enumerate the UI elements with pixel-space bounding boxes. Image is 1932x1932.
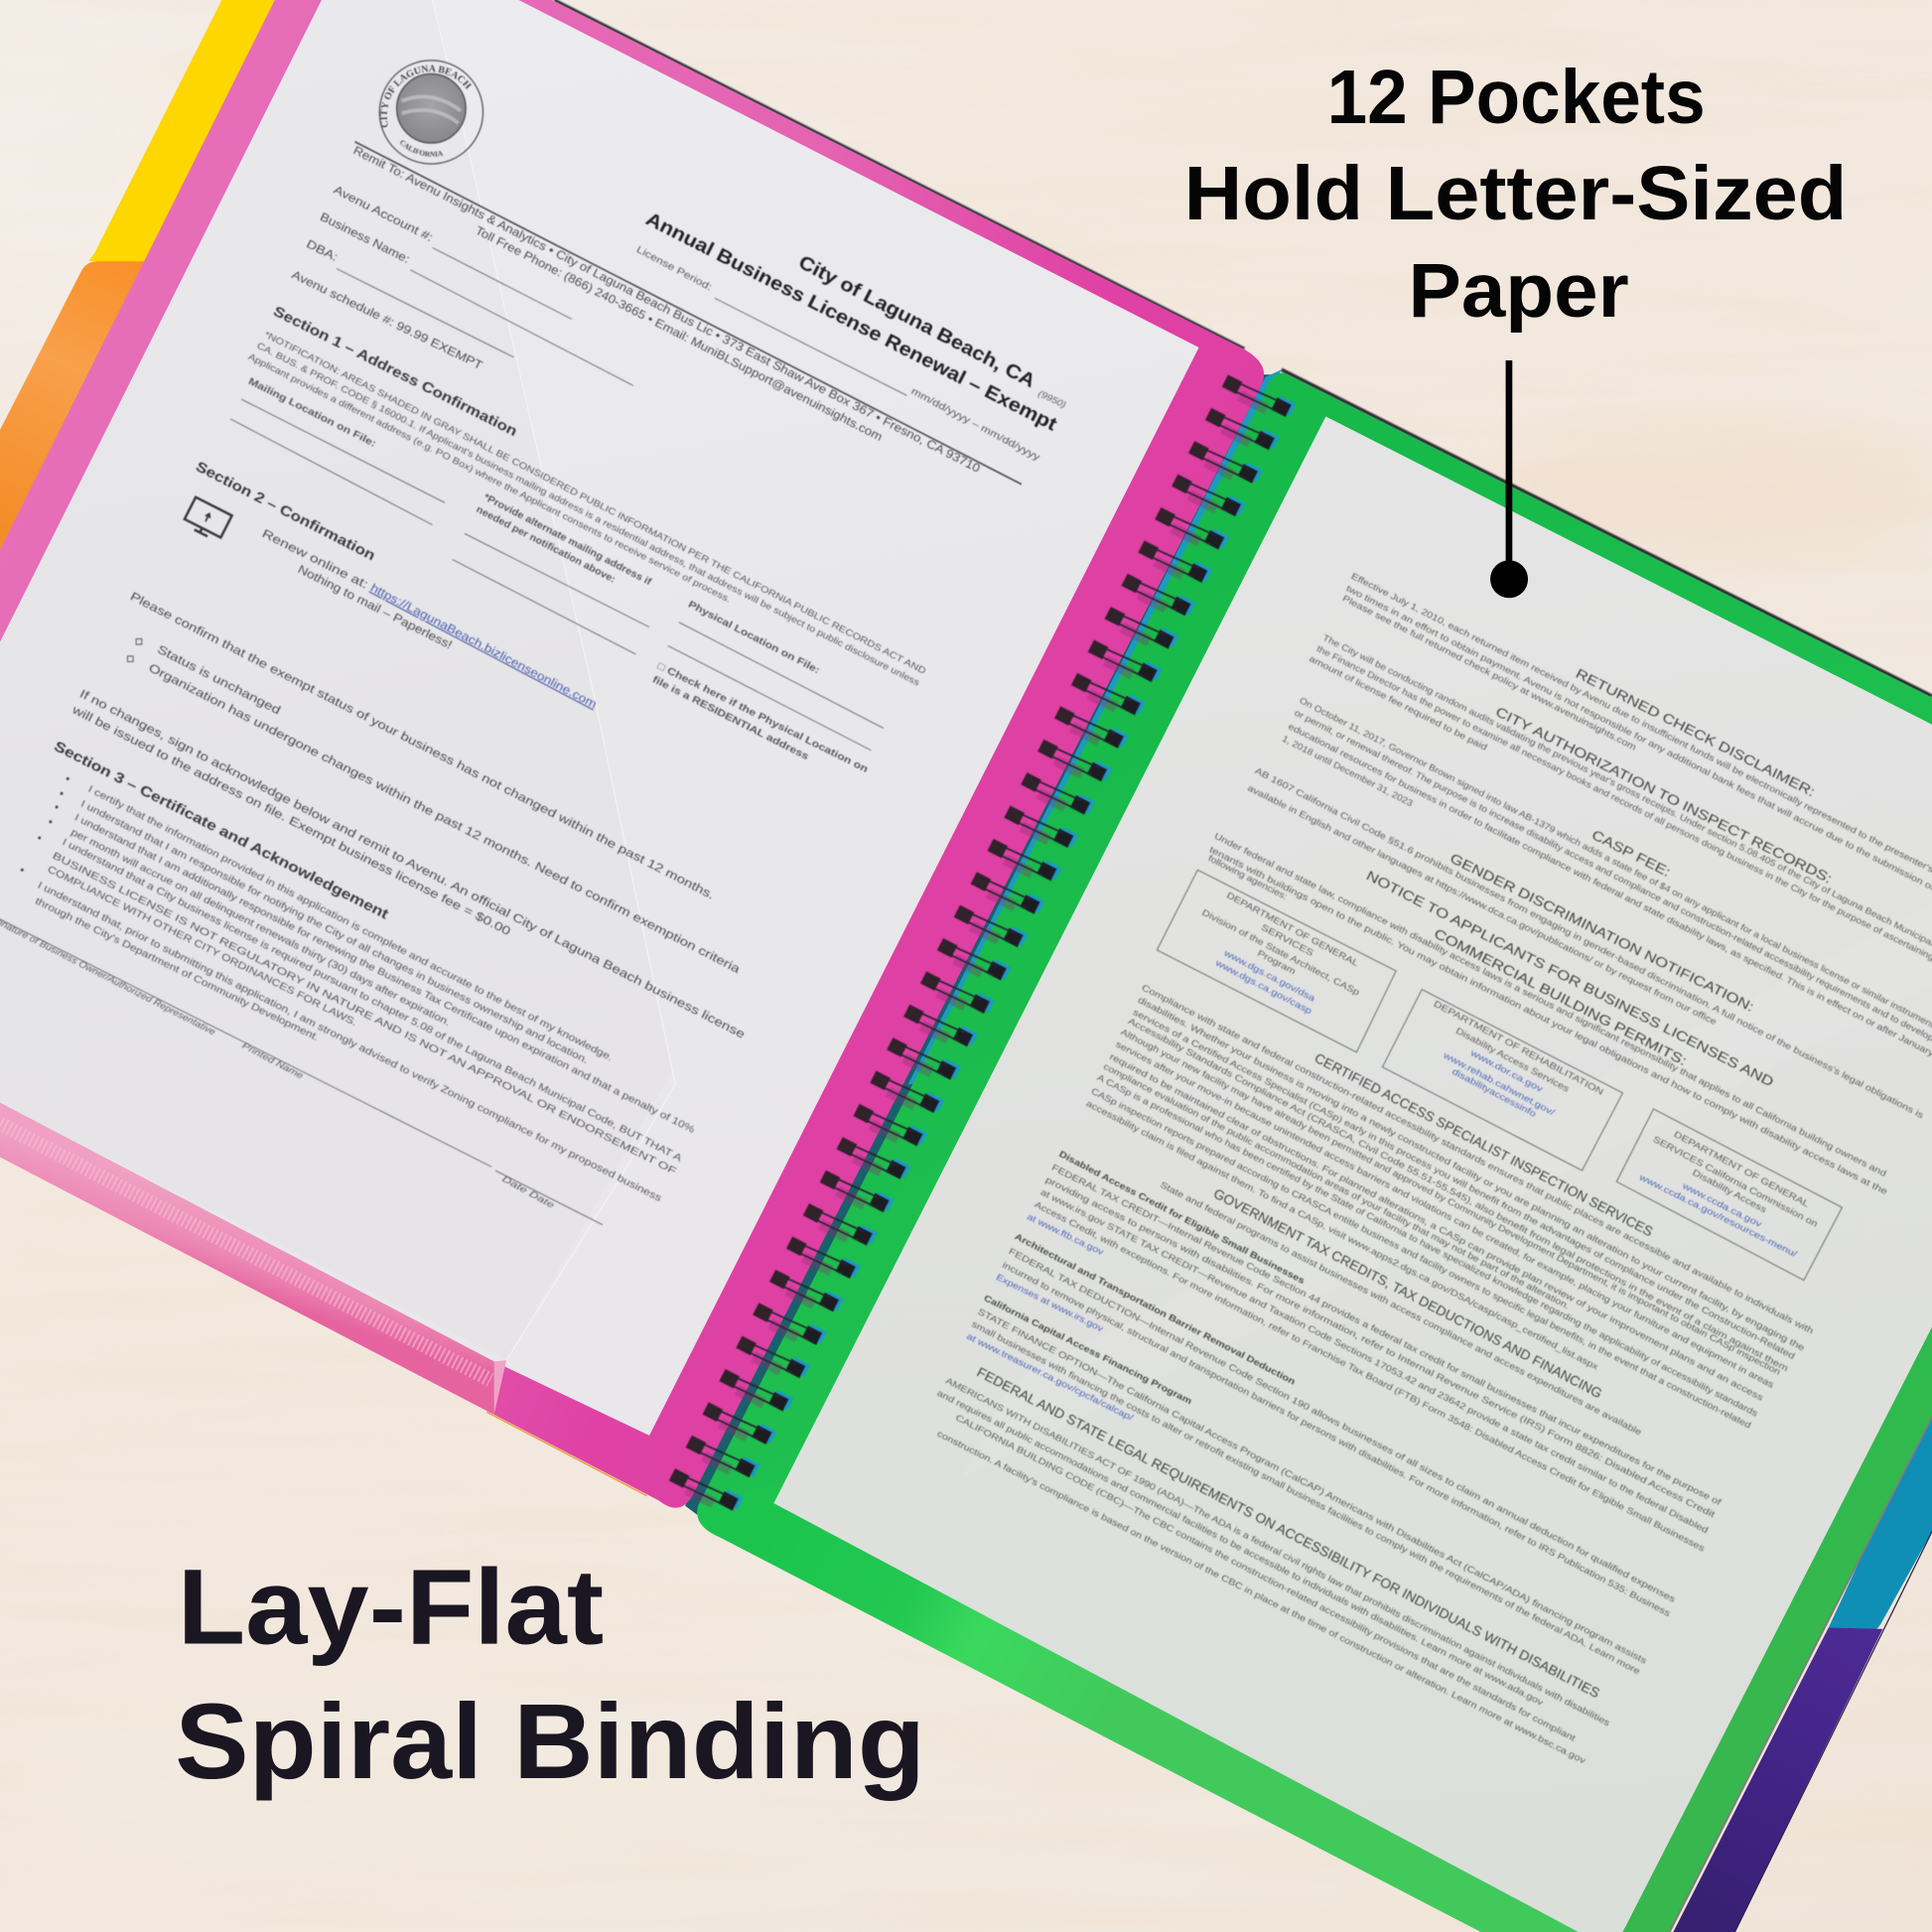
section 3: COMPLIANCE WITH OTHER CITY ORDINANCES FOR LAWS. <box>46 864 358 1029</box>
heading: 12 pockets hold letter-sized paper: 12 Pockets <box>1327 55 1706 140</box>
remit details: Avenu Account #: <box>332 183 436 244</box>
section 1: CA. BUS. & PROF. CODE § 16000.1. If Applicant's business mailing address is a residential address, that address will be subject to public disclosure unless <box>255 341 921 688</box>
pocket strip with ridges <box>0 1103 506 1415</box>
government tax credits: California Capital Access Financing Program <box>982 1293 1193 1406</box>
form header: License Period: <box>634 244 714 293</box>
clear pocket film with crease <box>0 0 675 1360</box>
section 1: *NOTIFICATION: AREAS SHADED IN GRAY SHALL BE CONSIDERED PUBLIC INFORMATION PER THE CALIFORNIA PUBLIC RECORDS ACT AND <box>263 330 928 676</box>
casp fee: 1, 2018 until December 31, 2023 <box>1281 734 1415 808</box>
certified access specialist services <box>1084 982 1815 1431</box>
certified access specialist services: Although your new facility may have already been permitted and approved by Community Development Department, it is important to obtain CASp inspection <box>1119 1027 1782 1377</box>
form header: City of Laguna Beach, CA <box>795 252 1038 392</box>
form header: (9950) <box>1036 388 1067 410</box>
federal and state legal requirements: construction. A facility's compliance is based on the version of the CBC in place at the time of construction or alteration. Learn more at www.bsc.ca.gov <box>935 1429 1587 1766</box>
section 1: Mailing Location on File: <box>246 376 377 450</box>
casp fee: educational resources for business in order to facilitate compliance with federal and state disability laws, as specified. This is in effect on or after January <box>1287 721 1932 1058</box>
right document: disclosures <box>935 571 1932 1766</box>
folder tabs: right side <box>1673 1405 1932 1932</box>
remit details: Avenu schedule #: 99.99 EXEMPT <box>290 267 484 372</box>
section 2: Renew online at: <box>260 526 370 592</box>
agency box 1: SERVICES <box>1260 922 1315 958</box>
city seal <box>377 59 484 165</box>
agency box 1: DEPARTMENT OF GENERAL <box>1225 890 1360 968</box>
right green cover <box>697 369 1932 1932</box>
section 2: Status is unchanged <box>155 642 283 717</box>
section 1: Section 1 – Address Confirmation <box>270 304 519 440</box>
agency box 1: www.dgs.ca.gov/dsa <box>1221 947 1316 1004</box>
tab: orange <box>0 261 150 550</box>
tab: yellow <box>88 0 275 286</box>
federal and state legal requirements: AMERICANS WITH DISABILITIES ACT OF 1990 (ADA)—The ADA is a federal civil rights law that prohibits discrimination against individuals with disabilities <box>944 1375 1612 1728</box>
casp fee: or permit, or renewal thereof. The purpose is to increase disability access and compliance and construction-related accessibility requirements and to develop <box>1293 708 1932 1043</box>
remit details: Remit To: Avenu Insights & Analytics • City of Laguna Beach Bus Lic • 373 East Shaw Ave Box 367 • Fresno, CA 93710 <box>351 143 983 476</box>
section 2: If no changes, sign to acknowledge below and remit to Avenu. An official City of Laguna Beach business license <box>77 686 748 1041</box>
federal and state legal requirements: CALIFORNIA BUILDING CODE (CBC)—The CBC contains the construction-related accessibility provisions that are the standards for compliant <box>954 1413 1578 1743</box>
notice to applicants <box>1206 831 1889 1196</box>
remit details: Toll Free Phone: (866) 240-3665 • Email: MuniBLSupport@avenuinsights.com <box>473 223 885 444</box>
returned check disclaimer <box>1341 571 1932 893</box>
section 1: Physical Location on File: <box>686 600 821 676</box>
casp fee <box>1281 695 1932 1058</box>
returned check disclaimer: Please see the full returned check policy at www.avenuinsights.com <box>1341 593 1638 753</box>
federal and state legal requirements: and requires all public accommodations and commercial facilities to be accessible to individuals with disabilities. Learn more at www.ada.gov <box>935 1388 1546 1708</box>
casp fee: CASP FEE: <box>1589 827 1673 880</box>
heading: 12 pockets hold letter-sized paper <box>1184 55 1847 334</box>
section 2: will be issued to the address on file. Exempt business license fee = $0.00 <box>69 702 513 938</box>
city seal: CITY OF LAGUNA BEACH <box>379 65 473 128</box>
agency box 1: Division of the State Architect, CASp <box>1200 907 1361 998</box>
section 3: I understand that a City business license is required pursuant to chapter 5.08 of the Laguna Beach Municipal Code, BUT THAT A <box>61 837 684 1165</box>
section 2: Please confirm that the exempt status of your business has not changed within the past 12 months. <box>128 589 717 902</box>
certified access specialist services: CASp inspection reports prepared according to CRASCA entitle business and facility owners to specific legal benefits, in the event that a construction-related <box>1089 1086 1752 1431</box>
heading: 12 pockets hold letter-sized paper: Paper <box>1409 248 1629 334</box>
lower green band <box>697 1484 1614 1932</box>
section 2: https://LagunaBeach.bizlicenseonline.com <box>368 581 600 711</box>
section 3: Date Date <box>500 1173 556 1210</box>
government tax credits: Disabled Access Credit for Eligible Small Businesses <box>1057 1149 1307 1286</box>
form header: mm/dd/yyyy – mm/dd/yyyy <box>909 386 1041 464</box>
agency box 2: www.dor.ca.gov <box>1468 1047 1545 1094</box>
section 1: file is a RESIDENTIAL address <box>650 674 811 762</box>
heading: lay-flat spiral binding <box>175 1547 925 1801</box>
clear film reflection <box>961 904 1932 1478</box>
notice to applicants: NOTICE TO APPLICANTS FOR BUSINESS LICENSES AND <box>1364 868 1776 1090</box>
city authorization: CITY AUTHORIZATION TO INSPECT RECORDS: <box>1493 704 1835 887</box>
tab: teal <box>1829 1405 1932 1634</box>
city authorization: amount of license fee required to be paid <box>1308 653 1489 753</box>
section 3: I certify that the information provided in this application is complete and accurate to the best of my knowledge. <box>86 784 615 1064</box>
section 1: □ Check here if the Physical Location on <box>655 661 870 775</box>
government tax credits: small businesses with financing the costs to alter or retrofit existing small business facilities to comply with the requirements of the federal ADA. Learn more <box>970 1318 1642 1676</box>
checkboxes <box>127 638 142 661</box>
government tax credits: STATE FINANCE OPTION—The California Capital Access Program (CalCAP) Americans with Disabilities Act (CalCAP/ADA) financing program assists <box>976 1307 1649 1666</box>
casp fee: On October 11, 2017, Governor Brown signed into law AB-1379 which adds a state fee of $4 on any applicant for a local business license or similar instrument <box>1298 695 1932 1030</box>
certified access specialist services: services of a Certified Access Specialist (CASp) early in this process you will benefit from the advantages of compliance under the Construction-Related <box>1132 1007 1797 1361</box>
left pink cover <box>0 0 1264 1508</box>
remit details: Business Name: <box>318 209 412 266</box>
left paper sheet <box>0 0 1199 1436</box>
section 3: BUSINESS LICENSE IS NOT REGULATORY IN NATURE AND IS NOT AN APPROVAL OR ENDORSEMENT OF <box>51 851 678 1177</box>
agency box 1: www.dgs.ca.gov/casp <box>1213 957 1313 1016</box>
section 2 <box>69 459 748 1041</box>
section 3: I understand that, prior to submitting this application, I am strongly advised to verify Zoning compliance for my proposed business <box>36 880 663 1204</box>
certified access specialist services: CERTIFIED ACCESS SPECIALIST INSPECTION SERVICES <box>1312 1050 1655 1239</box>
gender discrimination: available in English and other languages at https://www.dca.ca.gov/publications/ or by request from our office <box>1246 782 1719 1027</box>
agency box 3: www.ccda.ca.gov <box>1680 1180 1764 1229</box>
agency box 2: disabilityaccessinfo <box>1450 1066 1538 1119</box>
agency box 3: www.ccda.ca.gov/resources-menu/ <box>1637 1172 1799 1259</box>
remit details: DBA: <box>304 236 341 264</box>
city authorization: The City will be conducting random audits validating the previous year's gross receipts. Under section 5.08.405 of the City of Laguna Beach Municipal <box>1321 632 1932 948</box>
city seal: CALIFORNIA <box>399 139 444 157</box>
government tax credits <box>965 1149 1724 1676</box>
agency box 3 <box>1616 1109 1842 1280</box>
agency box 2 <box>1382 990 1622 1171</box>
section 1: *Provide alternate mailing address if <box>482 492 653 588</box>
spiral binding coils <box>669 374 1297 1511</box>
section 2: Section 2 – Confirmation <box>193 459 377 564</box>
section 2: Organization has undergone changes within the past 12 months. Need to confirm exemption criteria <box>147 660 743 976</box>
certified access specialist services: compliance evaluation of the public accommodation areas of your facility that may not be part of the alteration. <box>1102 1061 1572 1311</box>
section 1: needed per notification above: <box>475 504 618 586</box>
certified access specialist services: disabilities. Whether your business is moving into a newly constructed facility or you are planning an alteration to your current facility, by engaging the <box>1137 995 1807 1353</box>
gender discrimination: GENDER DISCRIMINATION NOTIFICATION: <box>1448 851 1756 1015</box>
heading: lay-flat spiral binding: Lay-Flat <box>178 1547 604 1667</box>
certified access specialist services: accessibility claim is filed against them. To find a CASp, visit www.apps2.dgs.ca.gov/DSA/casp/casp_certified_list.aspx <box>1084 1098 1600 1372</box>
heading: 12 pockets hold letter-sized paper: Hold Letter-Sized <box>1184 151 1847 236</box>
notice to applicants: following agencies: <box>1206 853 1289 901</box>
section 3: Printed Name <box>240 1040 305 1081</box>
government tax credits: incurred to remove physical, structural and transportation barriers for persons with disabilities. For more information, refer to IRS Publication 535: Business <box>1001 1260 1673 1618</box>
returned check disclaimer: two times in an effort to obtain payment. Avenu is not responsible for any additional bank fees that will accrue due to the submission of <box>1344 583 1932 893</box>
section 3: Section 3 – Certificate and Acknowledgement <box>52 739 391 923</box>
notice to applicants: Under federal and state law, compliance with disability access laws is a serious and significant responsibility that applies to all California building owners and <box>1213 831 1888 1178</box>
certified access specialist services: required to be maintained clear of obstructions. For planned alterations, a CASp can provide plan review of your improvement plans and an access <box>1108 1051 1765 1403</box>
left document: business license renewal form <box>0 142 1067 1225</box>
tab: purple <box>1673 1627 1882 1932</box>
government tax credits: at www.irs.gov STATE TAX CREDIT—Revenue and Taxation Code Sections 17053.42 and 23642 provide a state tax credit similar to the federal Disabled <box>1039 1186 1710 1535</box>
section 3: I understand that I am responsible for notifying the City of all changes in business ownership and location. <box>78 799 590 1066</box>
binding gap backing <box>685 374 1277 1520</box>
gender discrimination: AB 1607 California Civil Code §51.6 prohibits businesses from engaging in gender-based discrimination. A full notice of the business's legal obligations is <box>1253 765 1926 1121</box>
section 3: through the City's Department of Community Development. <box>33 897 321 1043</box>
certified access specialist services: A CASp is a professional who has been certified by the State of California to have specialized knowledge regarding the applicability of accessibility standards <box>1096 1072 1760 1419</box>
notice to applicants: tenants with buildings open to the public. You may obtain information about your legal obligations and how to comply with disability access laws at the <box>1208 844 1889 1196</box>
agency box 1 <box>1157 870 1396 1052</box>
form header <box>634 208 1067 464</box>
folder tabs: left side <box>0 0 275 550</box>
notice to applicants: COMMERCIAL BUILDING PERMITS: <box>1432 926 1689 1068</box>
section 3: per month will accrue on all delinquent renewals thirty (30) days after expiration. <box>69 827 452 1029</box>
heading: lay-flat spiral binding: Spiral Binding <box>175 1681 925 1801</box>
government tax credits: Access Credit, with exceptions. For more information, refer to Franchise Tax Board (FTB) Form 3548: Disabled Access Credit for Eligible Small Businesses <box>1033 1199 1707 1554</box>
agency box 2: DEPARTMENT OF REHABILITATION <box>1432 999 1605 1097</box>
section 1: Applicant provides a different address (e.g. PO Box) where the Applicant consents to receive service of process. <box>247 351 733 605</box>
form header: Annual Business License Renewal – Exempt <box>642 208 1060 436</box>
agency box 3: SERVICES California Commission on <box>1651 1134 1820 1229</box>
government tax credits: providing access to persons with disabilities. For more information, refer to Internal Revenue Service (IRS) Form 8826: Disabled Access Credit <box>1044 1174 1718 1520</box>
agency box 2: www.rehab.cahwnet.gov/ <box>1441 1049 1557 1118</box>
right paper sheet <box>773 416 1932 1932</box>
section 3 <box>0 739 696 1210</box>
government tax credits: GOVERNMENT TAX CREDITS, TAX DEDUCTIONS AND FINANCING <box>1211 1185 1604 1401</box>
certified access specialist services: Compliance with state and federal construction-related accessibility standards ensures that public places are accessible and available to individuals with <box>1140 982 1815 1336</box>
government tax credits: State and federal programs to assist businesses with access compliance and access expenditures are available <box>1159 1179 1643 1438</box>
government tax credits: FEDERAL TAX DEDUCTION—Internal Revenue Code Section 190 allows businesses of all sizes to claim an annual deduction for qualified expenses <box>1007 1246 1678 1604</box>
government tax credits: at www.treasurer.ca.gov/cpcfa/calcap/ <box>965 1331 1136 1423</box>
agency box 3: Disability Access <box>1691 1168 1769 1215</box>
certified access specialist services: Accessibility Standards Compliance Act (CRASCA, Civil Code 55.51-55.545), also benefit from legal protections in the event of a claim against them <box>1127 1016 1790 1373</box>
agency box 3: DEPARTMENT OF GENERAL <box>1672 1129 1811 1209</box>
government tax credits: FEDERAL TAX CREDIT—Internal Revenue Code Section 44 provides a federal tax credit for small businesses that incur expenditures for the purpose of <box>1050 1163 1724 1507</box>
teal inner strip <box>908 369 1282 1084</box>
agency box 2: Disability Access Services <box>1454 1026 1572 1094</box>
government tax credits: Expenses at www.irs.gov <box>995 1272 1105 1334</box>
returned check disclaimer: RETURNED CHECK DISCLAIMER: <box>1574 666 1818 799</box>
section 3: I understand that I am additionally responsible for renewing the Business Tax Certificate upon expiration and that a penalty of 10% <box>72 812 696 1136</box>
agency box 1: Program <box>1256 948 1298 976</box>
section 2: Nothing to mail – Paperless! <box>296 562 455 652</box>
callout pointer line and dot <box>1490 360 1528 598</box>
city authorization: the Finance Director has the power to examine all necessary books and records of all persons doing business in the City for the purpose of ascertaining <box>1315 643 1932 962</box>
government tax credits: at www.ftb.ca.gov <box>1026 1211 1106 1257</box>
form rule lines <box>0 142 1022 1225</box>
government tax credits: Architectural and Transportation Barrier Removal Deduction <box>1013 1231 1297 1387</box>
section 1 <box>246 304 928 775</box>
bullets <box>21 777 69 872</box>
returned check disclaimer: Effective July 1, 2010, each returned item received by Avenu due to insufficient funds will be electronically represented to the presenter's <box>1349 571 1932 875</box>
icon: monitor <box>183 497 232 542</box>
gender discrimination <box>1246 765 1926 1121</box>
certified access specialist services: services after your move-in because unintended access barriers and violations can be created, for example, placing your furniture and equipment in areas <box>1114 1039 1776 1390</box>
federal and state legal requirements: FEDERAL AND STATE LEGAL REQUIREMENTS ON ACCESSIBILITY FOR INDIVIDUALS WITH DISABILITIES <box>975 1364 1602 1701</box>
